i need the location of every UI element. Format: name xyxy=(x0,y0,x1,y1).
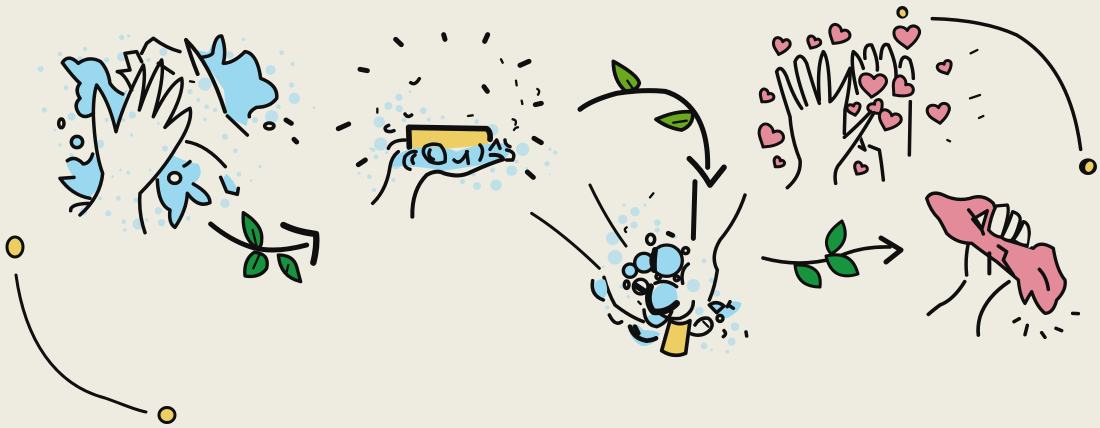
hands outline xyxy=(777,44,913,188)
panel: rinsing with pink lather xyxy=(927,193,1078,337)
soap bar xyxy=(409,127,490,152)
foam spatter xyxy=(602,203,739,354)
fingers xyxy=(969,205,1037,248)
thumb over hearts xyxy=(835,112,874,183)
arc with dots: upper right xyxy=(896,6,1097,175)
foam bubbles on hand xyxy=(391,143,510,171)
bubble cluster xyxy=(623,193,689,327)
panel: soap lathering in hand xyxy=(338,35,557,217)
splash: lower centre xyxy=(157,153,210,227)
arm lines xyxy=(928,245,1009,335)
pink lather xyxy=(927,193,1065,313)
small marks xyxy=(947,50,983,141)
splash: upper right xyxy=(197,36,277,126)
splash: small right xyxy=(223,174,238,193)
panel: wet hands with water splashes xyxy=(38,34,316,282)
soap bar xyxy=(662,321,690,355)
arrow with leaves xyxy=(211,213,316,282)
foam spatter xyxy=(358,90,557,192)
lather details xyxy=(998,246,1048,289)
lower foam xyxy=(592,279,667,346)
splash: upper left xyxy=(62,58,127,132)
splash: lower left xyxy=(60,153,103,198)
right side bubbles xyxy=(690,301,747,337)
impact dashes xyxy=(1014,313,1078,337)
hearts xyxy=(752,22,954,178)
arc with dots: lower left xyxy=(7,237,175,422)
panel: clean hands with hearts xyxy=(752,6,1097,188)
forearm and hand lines xyxy=(532,182,745,322)
panel: bubbles and soap between hands xyxy=(532,182,747,355)
arrow with two green leaves xyxy=(580,61,724,185)
cupped hand outline xyxy=(373,140,514,217)
water spatter xyxy=(38,34,315,232)
arrow with green leaves: to rinse step xyxy=(763,221,901,287)
motion dashes and droplets xyxy=(338,35,541,177)
outlines of splashes and hands xyxy=(59,36,297,233)
